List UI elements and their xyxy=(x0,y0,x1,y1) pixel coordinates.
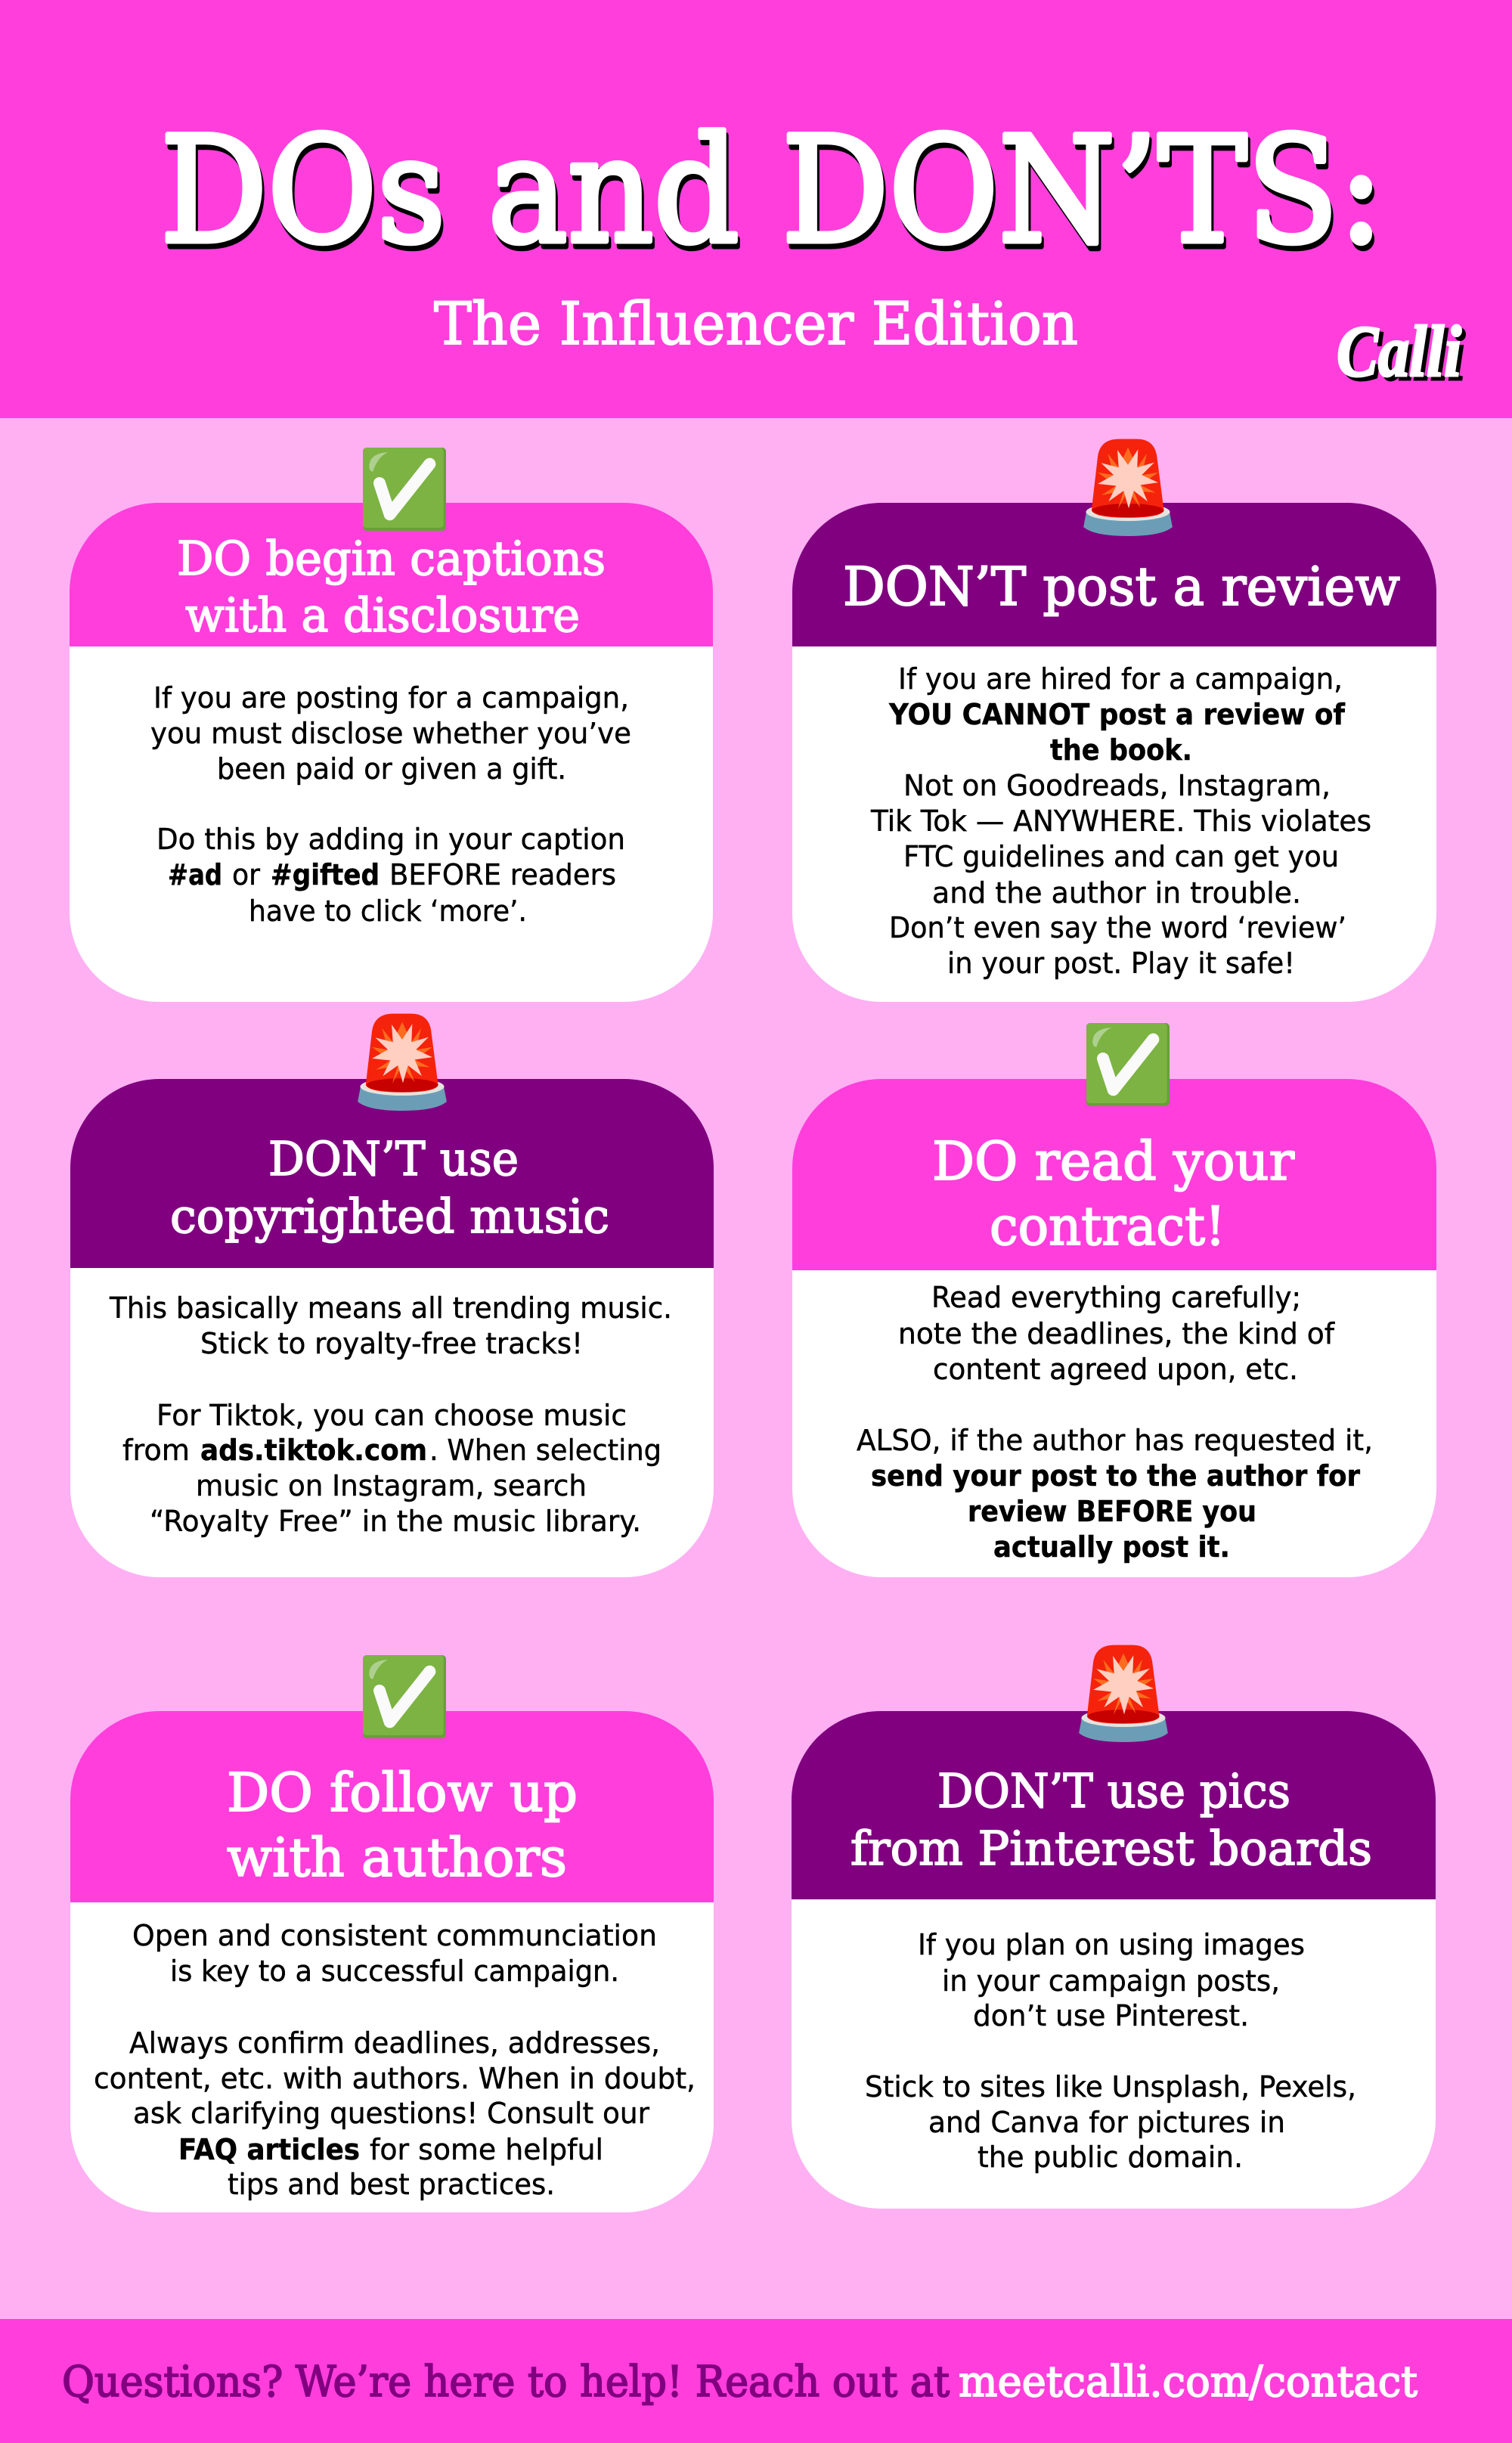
heading: DO begin captions xyxy=(177,531,606,586)
heading xyxy=(932,1130,1295,1257)
body text: #ad xyxy=(168,858,222,891)
body text xyxy=(150,681,631,928)
body text xyxy=(857,1281,1373,1564)
body text: in your campaign posts, xyxy=(942,1964,1280,1998)
icon: red siren xyxy=(1079,1645,1168,1742)
body text: . When selecting xyxy=(429,1434,662,1467)
body text: and Canva for pictures in xyxy=(928,2106,1285,2139)
heading: DO read your xyxy=(932,1130,1295,1192)
panel: DON'T post a review xyxy=(792,439,1436,1002)
body text: and the author in trouble. xyxy=(932,876,1301,910)
header band xyxy=(0,0,1512,418)
panel: DON'T use copyrighted music xyxy=(70,1014,714,1577)
body text: review BEFORE you xyxy=(968,1495,1256,1528)
panel: DON'T use pics from Pinterest boards xyxy=(792,1645,1436,2209)
body text: Open and consistent communciation xyxy=(132,1919,657,1952)
body text: in your post. Play it safe! xyxy=(947,947,1295,980)
body text: have to click ‘more’. xyxy=(249,894,527,928)
body text: the public domain. xyxy=(978,2141,1243,2174)
body text: send your post to the author for xyxy=(871,1459,1360,1493)
body text: don’t use Pinterest. xyxy=(973,1999,1249,2032)
body text xyxy=(109,1291,672,1538)
panel: DO read your contract! xyxy=(792,1023,1436,1577)
body text: actually post it. xyxy=(993,1530,1230,1564)
heading xyxy=(170,1131,609,1244)
body text: ads.tiktok.com xyxy=(200,1434,427,1467)
body text: music on Instagram, search xyxy=(196,1469,587,1502)
body text: Always confirm deadlines, addresses, xyxy=(129,2026,660,2060)
heading: with a disclosure xyxy=(185,587,580,643)
heading: copyrighted music xyxy=(170,1189,609,1244)
body text: ask clarifying questions! Consult our xyxy=(133,2097,649,2130)
heading xyxy=(850,1763,1372,1876)
heading: with authors xyxy=(227,1827,567,1889)
title: DOs and DON’TS: xyxy=(160,105,1383,276)
body text: If you are hired for a campaign, xyxy=(898,662,1343,696)
body text: Not on Goodreads, Instagram, xyxy=(903,769,1331,802)
body text: note the deadlines, the kind of xyxy=(898,1317,1336,1350)
icon: green check xyxy=(363,1655,446,1738)
icon: red siren xyxy=(358,1014,447,1111)
body text: content agreed upon, etc. xyxy=(933,1353,1298,1386)
body text: BEFORE readers xyxy=(389,858,616,891)
body text: FAQ articles xyxy=(178,2133,360,2166)
heading: DON’T use xyxy=(268,1131,519,1186)
body text: from xyxy=(122,1434,190,1467)
body text xyxy=(94,1919,696,2201)
panel: DO follow up with authors xyxy=(70,1655,714,2212)
body text: been paid or given a gift. xyxy=(217,752,566,786)
footer band xyxy=(0,2319,1512,2443)
body text: For Tiktok, you can choose music xyxy=(156,1399,627,1432)
body text: YOU CANNOT post a review of xyxy=(888,698,1345,731)
body text: is key to a successful campaign. xyxy=(170,1955,619,1988)
footer question text: Questions? We’re here to help! Reach out at xyxy=(62,2358,950,2407)
body text: “Royalty Free” in the music library. xyxy=(150,1505,641,1538)
body text: tips and best practices. xyxy=(228,2168,555,2201)
subtitle: The Influencer Edition xyxy=(434,290,1078,358)
body text: ALSO, if the author has requested it, xyxy=(857,1424,1373,1457)
body text: Stick to sites like Unsplash, Pexels, xyxy=(865,2070,1356,2104)
body text: FTC guidelines and can get you xyxy=(903,840,1339,873)
icon: green check xyxy=(363,448,446,531)
body text: If you are posting for a campaign, xyxy=(153,681,629,715)
icon: green check xyxy=(1086,1023,1170,1106)
body text xyxy=(870,662,1371,980)
footer link text: meetcalli.com/contact xyxy=(959,2358,1418,2407)
body text: Don’t even say the word ‘review’ xyxy=(889,911,1346,944)
body text: Read everything carefully; xyxy=(931,1281,1301,1314)
body text: If you plan on using images xyxy=(918,1928,1305,1961)
heading: contract! xyxy=(990,1195,1225,1257)
heading xyxy=(177,531,606,643)
heading: DON’T post a review xyxy=(843,556,1400,618)
body text: you must disclose whether you’ve xyxy=(150,717,631,750)
panel: DO begin captions with a disclosure xyxy=(70,448,713,1002)
body text: or xyxy=(232,858,260,891)
body text xyxy=(865,1928,1356,2174)
heading: DON’T use pics xyxy=(937,1763,1290,1818)
body text: the book. xyxy=(1050,733,1192,767)
heading: from Pinterest boards xyxy=(850,1821,1372,1876)
body text: for some helpful xyxy=(370,2133,603,2166)
body text: #gifted xyxy=(271,858,380,891)
logo: Calli: Calli xyxy=(1337,311,1461,392)
icon: red siren xyxy=(1083,439,1173,536)
body text: content, etc. with authors. When in doubt, xyxy=(94,2062,696,2095)
body text: This basically means all trending music. xyxy=(109,1291,672,1325)
body text: Tik Tok — ANYWHERE. This violates xyxy=(870,805,1371,838)
heading: DO follow up xyxy=(227,1762,578,1824)
heading xyxy=(227,1762,578,1889)
body text: Do this by adding in your caption xyxy=(156,823,625,856)
body text: Stick to royalty-free tracks! xyxy=(200,1327,583,1360)
